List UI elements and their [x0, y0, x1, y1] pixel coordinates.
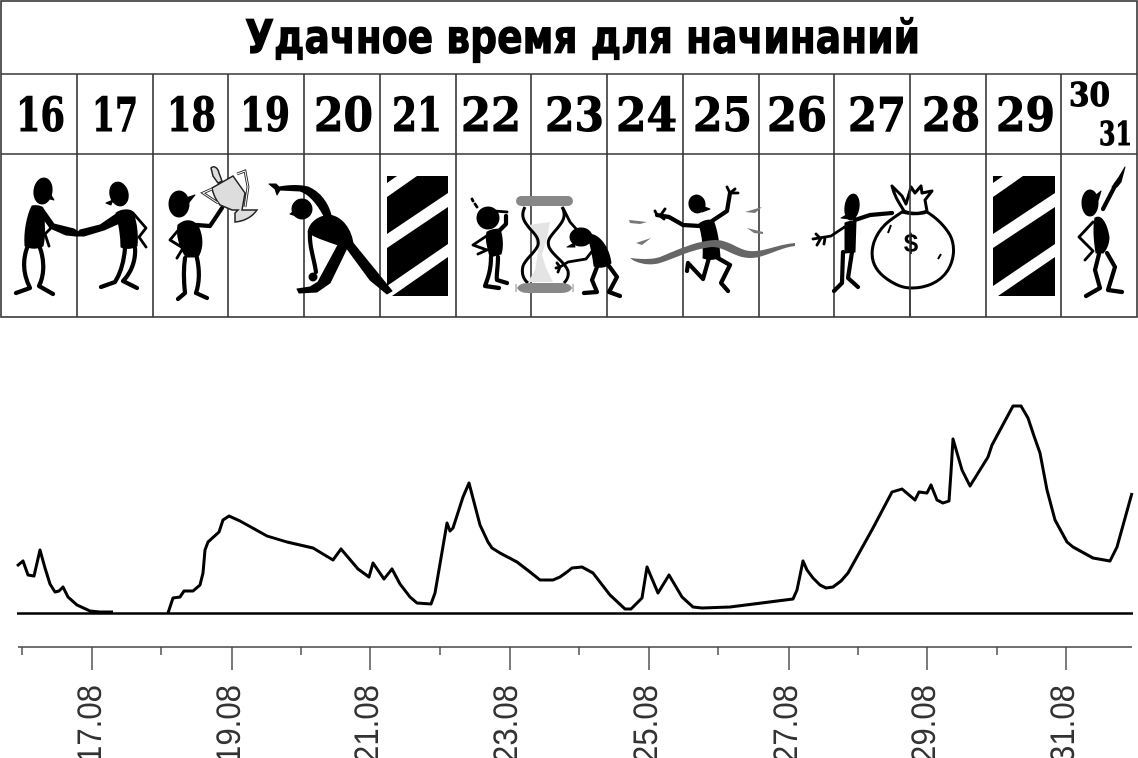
line chart	[17, 406, 1133, 758]
date numbers: 29	[996, 88, 1055, 143]
date numbers: 20	[314, 88, 373, 143]
icon: figure leaning on hourglass	[556, 208, 620, 296]
icon: hourglass	[516, 196, 573, 293]
date axis	[18, 647, 1132, 670]
date numbers: 22	[461, 88, 521, 143]
date numbers: 23	[545, 88, 604, 143]
icon: figure with trophy	[169, 167, 257, 299]
icon: figure scratching head	[472, 199, 507, 288]
date numbers: 30	[1069, 75, 1110, 114]
date numbers: 26	[767, 88, 827, 143]
date numbers: 28	[922, 88, 980, 143]
icon: runner crossing finish ribbon	[629, 187, 795, 291]
icon: striped block for 29	[993, 176, 1055, 296]
table grid	[1, 1, 1137, 317]
date numbers: 27	[848, 88, 906, 143]
icon: figure with money bag	[813, 154, 954, 317]
icon: striped block for 21	[387, 176, 448, 296]
date numbers: 24	[616, 88, 677, 143]
date numbers: 21	[392, 88, 442, 143]
icon: figure pointing up	[1079, 167, 1125, 296]
date numbers: 19	[240, 88, 290, 143]
title: Удачное время для начинаний	[245, 10, 920, 64]
date numbers: 16	[16, 88, 65, 143]
axis date labels	[71, 685, 1082, 758]
date numbers: 17	[92, 88, 138, 143]
icon: stretching figure	[269, 184, 392, 294]
date numbers: 18	[167, 88, 216, 143]
date numbers	[16, 75, 1132, 153]
data curve	[17, 406, 1132, 613]
icon: figure with money bag: $	[904, 228, 919, 258]
icon: two figures shaking hands	[16, 177, 146, 294]
zero baseline	[17, 612, 1133, 615]
date numbers: 25	[693, 88, 752, 143]
